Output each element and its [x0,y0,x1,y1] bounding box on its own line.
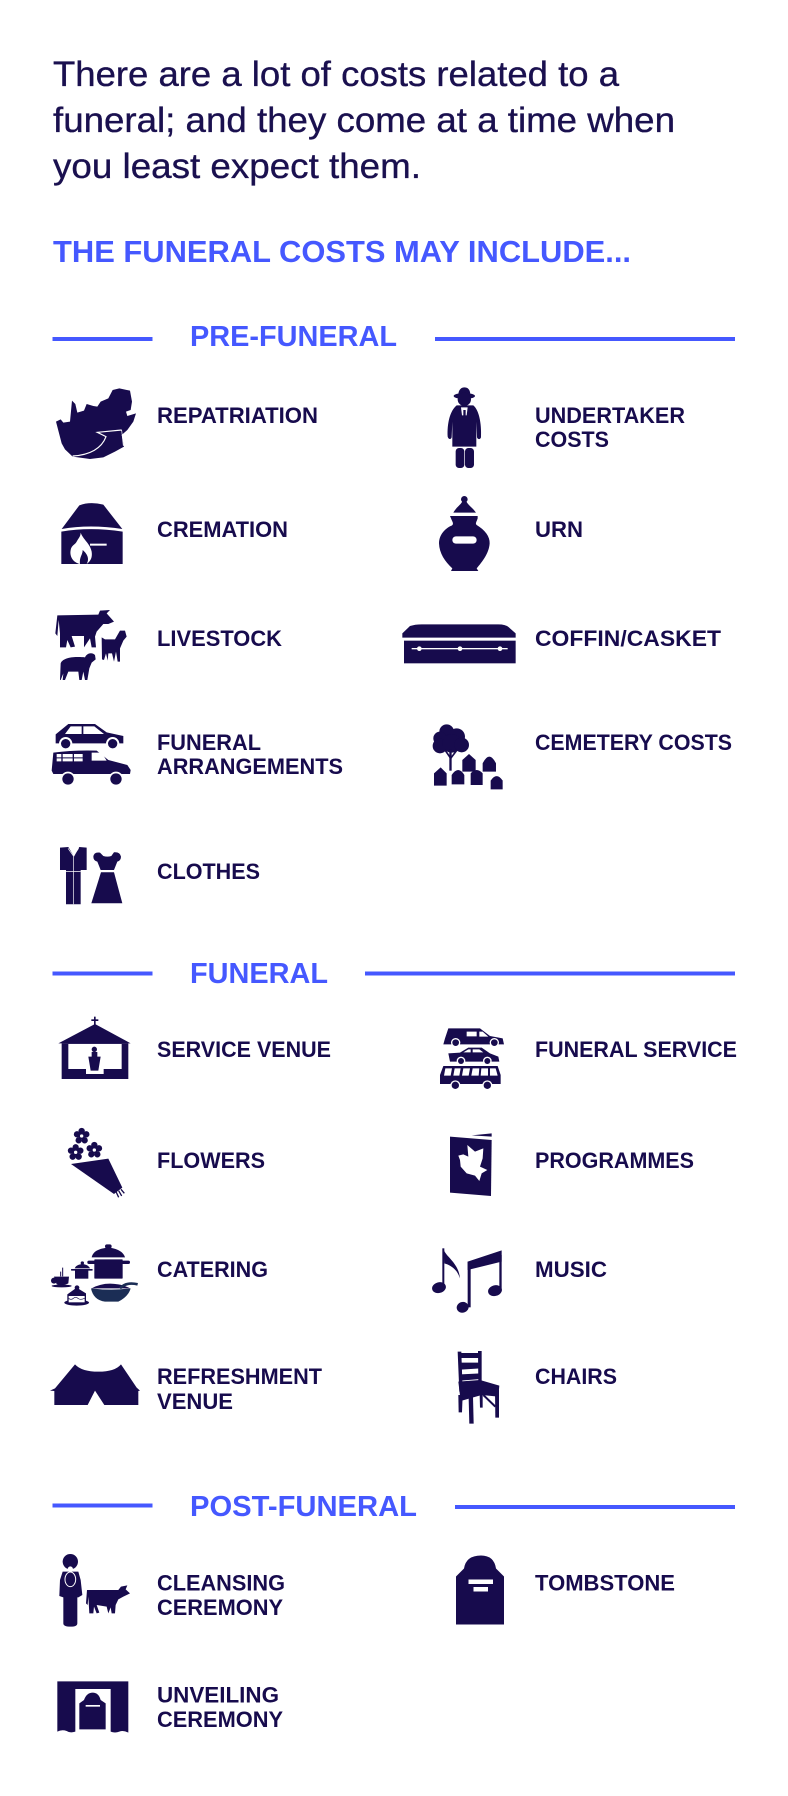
heading: post-funeral: POST-FUNERAL [190,1491,417,1523]
subtitle: THE FUNERAL COSTS MAY INCLUDE... [53,234,631,269]
icon: south africa map with arrow [56,388,136,459]
label [157,730,343,779]
label [157,1682,283,1732]
intro text: funeral; and they come at a time when [53,101,675,140]
panel: post-funeral [52,1491,735,1733]
icon: tent [50,1364,140,1405]
intro text: There are a lot of costs related to a [53,55,620,94]
icon: church with pulpit [58,1017,131,1079]
label: ARRANGEMENTS [157,754,343,779]
item: catering [51,1244,268,1306]
icon: woman and cow [59,1554,130,1627]
heading: post-funeral [52,1491,735,1523]
label [157,1570,285,1620]
icon: undertaker figure [448,387,481,468]
icon: pots, cup, cake and bowl [51,1244,138,1306]
heading: pre-funeral: PRE-FUNERAL [190,321,397,353]
item: unveiling ceremony [57,1681,283,1733]
icon: programme with dove [450,1133,492,1196]
label: PROGRAMMES [535,1148,694,1173]
label: COFFIN/CASKET [535,626,721,651]
heading: funeral: FUNERAL [190,958,328,990]
item: programmes [450,1133,694,1196]
item: chairs [458,1351,617,1424]
label: UNDERTAKER [535,403,685,428]
label: REFRESHMENT [157,1364,322,1389]
item: funeral arrangements [52,724,343,786]
label: VENUE [157,1389,233,1414]
label: CHAIRS [535,1364,617,1389]
icon: urn [439,496,490,571]
label: MUSIC [535,1257,607,1282]
item: undertaker costs [448,387,685,468]
heading: pre-funeral [52,321,735,353]
label: CREMATION [157,517,288,542]
item: cremation [61,503,288,564]
icon: tombstone [456,1556,504,1624]
label: CATERING [157,1257,268,1282]
intro text [53,55,675,186]
label: FLOWERS [157,1148,265,1173]
icon: curtain and tombstone [57,1681,128,1733]
item: service venue [58,1017,331,1079]
label: CEREMONY [157,1595,283,1620]
label: URN [535,517,583,542]
item: music [431,1248,607,1314]
label: CLOTHES [157,859,260,884]
label: UNVEILING [157,1682,279,1708]
icon: coffin [402,624,516,663]
item: tombstone [456,1556,675,1624]
icon: cow, goat and sheep [55,610,127,680]
icon: music notes [431,1248,503,1314]
icon: tree and gravestones [433,724,503,789]
item: flowers [68,1128,265,1197]
item: cemetery costs [433,724,732,789]
icon: hearse, car and bus [440,1028,504,1090]
label: REPATRIATION [157,403,318,428]
icon: chair [458,1351,499,1424]
label: CLEANSING [157,1570,285,1596]
item: coffin/casket [402,624,721,663]
heading: funeral [52,958,735,990]
item: repatriation [56,388,318,459]
label: FUNERAL [157,730,261,755]
panel: funeral [50,958,737,1424]
label [535,403,685,452]
label: TOMBSTONE [535,1570,675,1596]
panel: pre-funeral [52,321,735,904]
item: cleansing ceremony [59,1554,285,1627]
label: SERVICE VENUE [157,1037,331,1062]
icon: car and hearse [52,724,131,786]
label: CEREMONY [157,1707,283,1732]
label: CEMETERY COSTS [535,730,732,755]
label: LIVESTOCK [157,626,283,651]
label [157,1364,322,1414]
item: clothes [60,847,260,904]
item: livestock [55,610,283,680]
item: refreshment venue [50,1364,322,1414]
icon: crematorium [61,503,123,564]
item: urn [439,496,583,571]
icon: suit and dress [60,847,122,904]
intro text: you least expect them. [53,147,421,186]
item: funeral service [440,1028,737,1090]
label: COSTS [535,427,609,452]
icon: bouquet [68,1128,124,1197]
label: FUNERAL SERVICE [535,1037,737,1062]
